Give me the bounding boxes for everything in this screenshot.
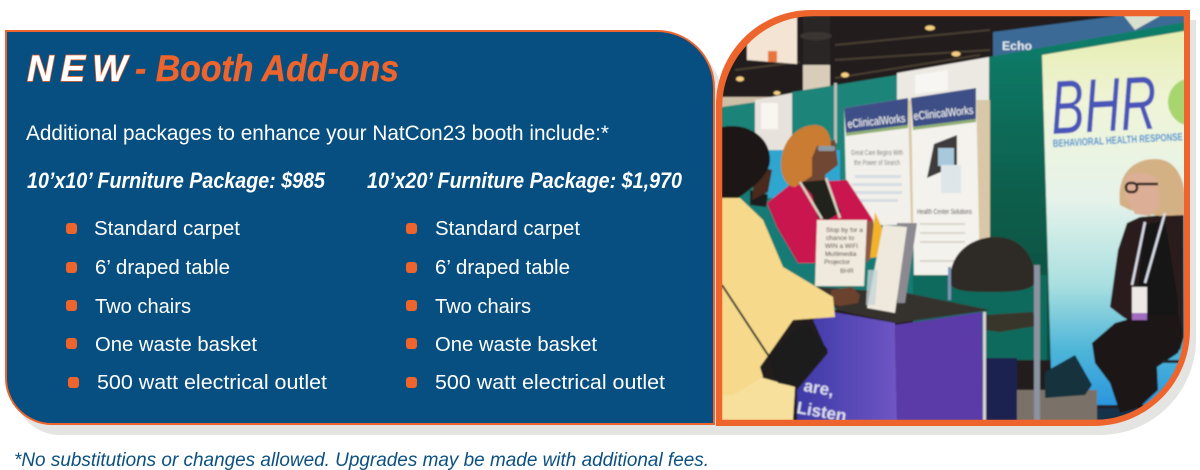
floor items [985,355,1157,420]
table: are, [802,376,835,400]
package heading: 10’x10’ Furniture Package: $985 [27,168,326,193]
banner stand: search: the Power of Search [854,158,900,167]
list of items: 6’ draped table [95,257,230,279]
list of items: 6’ draped table [435,257,570,279]
table sign: BHR [840,268,854,275]
banner stand: search: eClinicalWorks [847,113,906,131]
chair [948,237,1040,420]
panel background [6,31,714,424]
package heading: 10’x20’ Furniture Package: $1,970 [367,168,683,193]
photo drop shadow [722,20,1196,435]
column: 10x20 package [367,168,683,394]
banner stand: health center solutions [911,88,980,275]
intro text: Additional packages to enhance your NatCon23 booth include:* [26,122,609,145]
list of items: Two chairs [435,296,531,318]
table sign: Stop by for a [826,227,863,234]
brochure holder [866,223,917,313]
hanging sign [747,17,797,64]
blue overhead banner: Echo [1002,39,1032,53]
ceiling lights [736,26,960,95]
woman at center [767,125,878,263]
table sign: Multimedia [825,251,857,258]
green side wall [989,22,1184,360]
table [795,287,990,426]
backdrop behind people [738,189,914,312]
monitor [767,150,840,198]
banner stand: health center solutions: eClinicalWorks [913,105,974,123]
photo frame [716,10,1190,426]
panel drop shadow [14,41,722,435]
column [800,16,832,91]
BHR banner [1042,30,1200,405]
back drapes [722,56,990,180]
list of items: Two chairs [95,296,191,318]
photo: conference booth [716,10,1200,426]
list of items: 500 watt electrical outlet [435,372,665,394]
table: Listen [795,398,848,426]
yellow accent [870,212,883,258]
banner stand: search [844,98,990,240]
heading: NEW [27,48,130,89]
list of items: Standard carpet [435,218,580,240]
banner stand: health center solutions: Health Center Solutions [917,207,972,216]
banner stand: search: Great Care Begins With [851,148,903,157]
blue overhead banner [993,16,1184,57]
list of items: One waste basket [95,334,257,356]
teal drape behind chair [913,275,1047,360]
list of items: One waste basket [435,334,597,356]
table sign: WIN a WiFi [825,243,858,250]
list of items: 500 watt electrical outlet [97,372,327,394]
column: 10x10 package [27,168,327,394]
table sign: chance to [826,235,855,242]
heading: - Booth Add-ons [135,48,399,89]
table sign [815,220,867,286]
panel: booth add-ons [6,31,714,424]
photo scene [722,16,1200,426]
list of items [66,218,327,394]
list of items [406,218,665,394]
heading [27,48,399,89]
woman at left [722,126,860,420]
table sign: Projector [824,259,851,266]
list of items: Standard carpet [94,218,240,240]
woman at right [1092,159,1186,413]
